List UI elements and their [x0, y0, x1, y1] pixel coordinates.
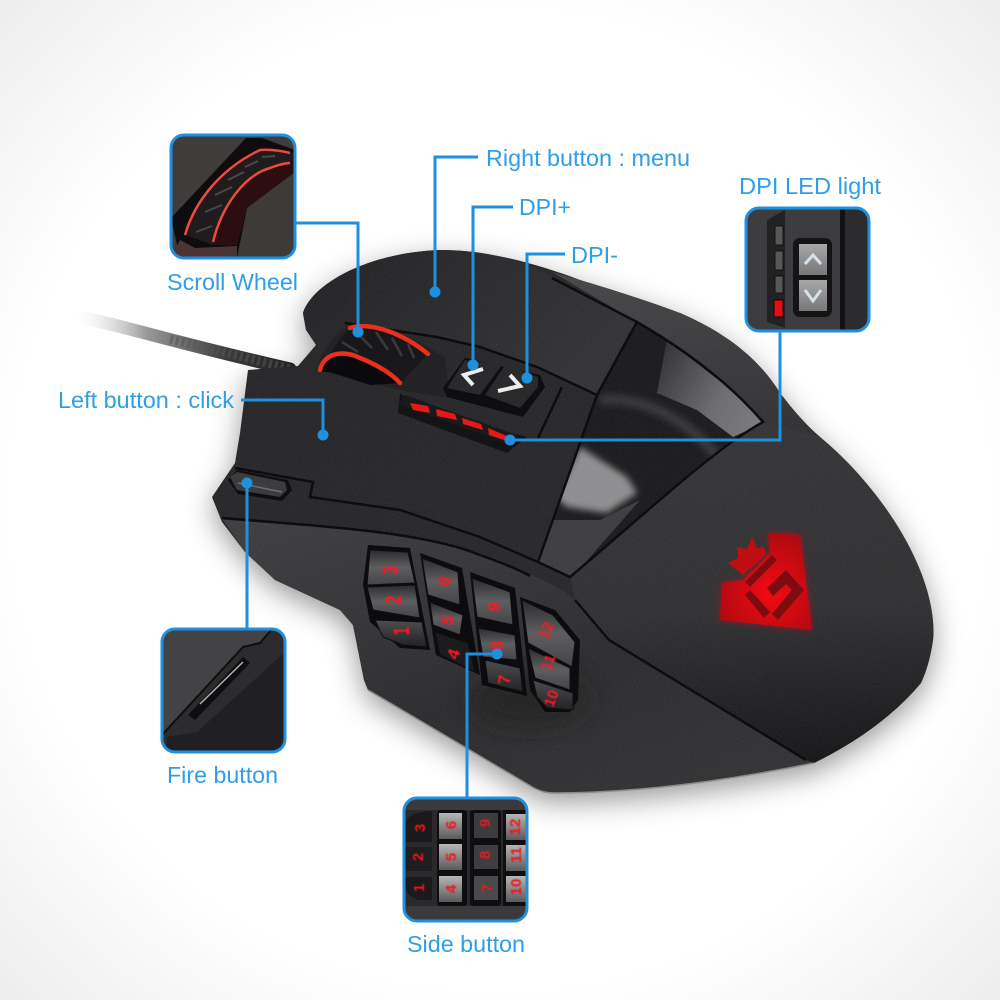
- side button numerals: 5: [437, 612, 458, 628]
- side button numerals: 1: [390, 626, 415, 635]
- side button 5: [430, 602, 463, 635]
- palm rest: [570, 422, 933, 763]
- inset: DPI LED: [746, 208, 869, 331]
- glowing red logo: [720, 533, 812, 630]
- panel seams: [222, 278, 806, 760]
- inset: side buttons: 1: [411, 884, 428, 892]
- side button 8: [478, 628, 517, 660]
- glossy panel: [540, 324, 761, 576]
- callout: DPI LED light: DPI LED light: [739, 173, 882, 199]
- right button: [303, 250, 637, 395]
- callout: scroll wheel: [167, 135, 364, 338]
- button column backings: [363, 545, 580, 712]
- side button 4: [435, 632, 475, 672]
- body silhouette: [212, 250, 933, 793]
- side button 2: [367, 585, 420, 618]
- mouse shadow: [212, 259, 933, 802]
- side button numerals: 7: [495, 674, 514, 685]
- lower side panel: [222, 518, 814, 793]
- side button numerals: 9: [484, 601, 505, 613]
- callout: right button: Right button : menu: [486, 145, 690, 171]
- callout: scroll wheel: Scroll Wheel: [167, 269, 298, 295]
- side button numerals: 8: [488, 640, 507, 651]
- inset: side buttons: 5: [443, 853, 460, 861]
- callout: left button: Left button : click: [58, 387, 235, 413]
- side button 11: [528, 648, 570, 690]
- callout: side button: [404, 648, 527, 957]
- mouse cable: [85, 318, 290, 369]
- inset: side buttons: 10: [508, 879, 525, 895]
- inset: side buttons: 2: [410, 853, 427, 861]
- side button numerals: 2: [382, 596, 407, 604]
- callout: left button: [58, 387, 328, 440]
- side button numerals: 6: [434, 573, 455, 589]
- callout: fire button: [162, 478, 285, 788]
- wheel housing: [316, 324, 450, 398]
- DPI LED strip: [398, 393, 527, 453]
- surface grain: [200, 240, 940, 800]
- DPI buttons: [443, 358, 545, 417]
- bottom edge highlight: [368, 690, 814, 793]
- side button 3: [367, 550, 415, 585]
- side buttons on body: [363, 545, 580, 712]
- inset: side buttons: [404, 798, 527, 921]
- callout: right button: [430, 145, 690, 298]
- inset: side buttons: 11: [508, 847, 525, 863]
- inset: side buttons: 9: [477, 819, 494, 827]
- inset: side buttons: 3: [412, 824, 429, 832]
- callout: fire button: Fire button: [167, 762, 278, 788]
- callout: DPI-: DPI-: [571, 242, 618, 268]
- inset: side buttons: 12: [507, 819, 524, 835]
- inset: side buttons: 8: [477, 851, 494, 859]
- scroll wheel: [318, 326, 428, 385]
- callout: DPI LED light: [504, 173, 882, 446]
- side button 1: [375, 620, 427, 647]
- side button 10: [533, 680, 573, 710]
- side button numerals: 11: [538, 652, 559, 673]
- side button numerals: 4: [443, 646, 465, 662]
- inset: side buttons: 7: [479, 884, 496, 892]
- side button 6: [422, 558, 460, 605]
- dark pocket under side buttons: [470, 672, 590, 728]
- side button 12: [522, 600, 575, 667]
- inset: side buttons: 4: [443, 884, 460, 893]
- mouse body: [200, 240, 940, 800]
- callout: DPI-: [522, 242, 618, 384]
- side button numerals: [379, 566, 563, 709]
- callout: DPI+: DPI+: [519, 194, 571, 220]
- callout: side button: Side button: [407, 931, 525, 957]
- outer rim: [552, 272, 820, 437]
- fire button on body: [228, 470, 292, 501]
- inset: fire button: [162, 629, 285, 752]
- callout: DPI+: [468, 194, 571, 370]
- side button 7: [485, 660, 523, 692]
- side button 9: [472, 578, 513, 625]
- side button numerals: 3: [379, 566, 404, 574]
- inset: scroll wheel: [171, 135, 295, 258]
- side button numerals: 12: [536, 620, 558, 641]
- inset: side buttons: 6: [443, 821, 460, 829]
- side button numerals: 10: [541, 688, 563, 709]
